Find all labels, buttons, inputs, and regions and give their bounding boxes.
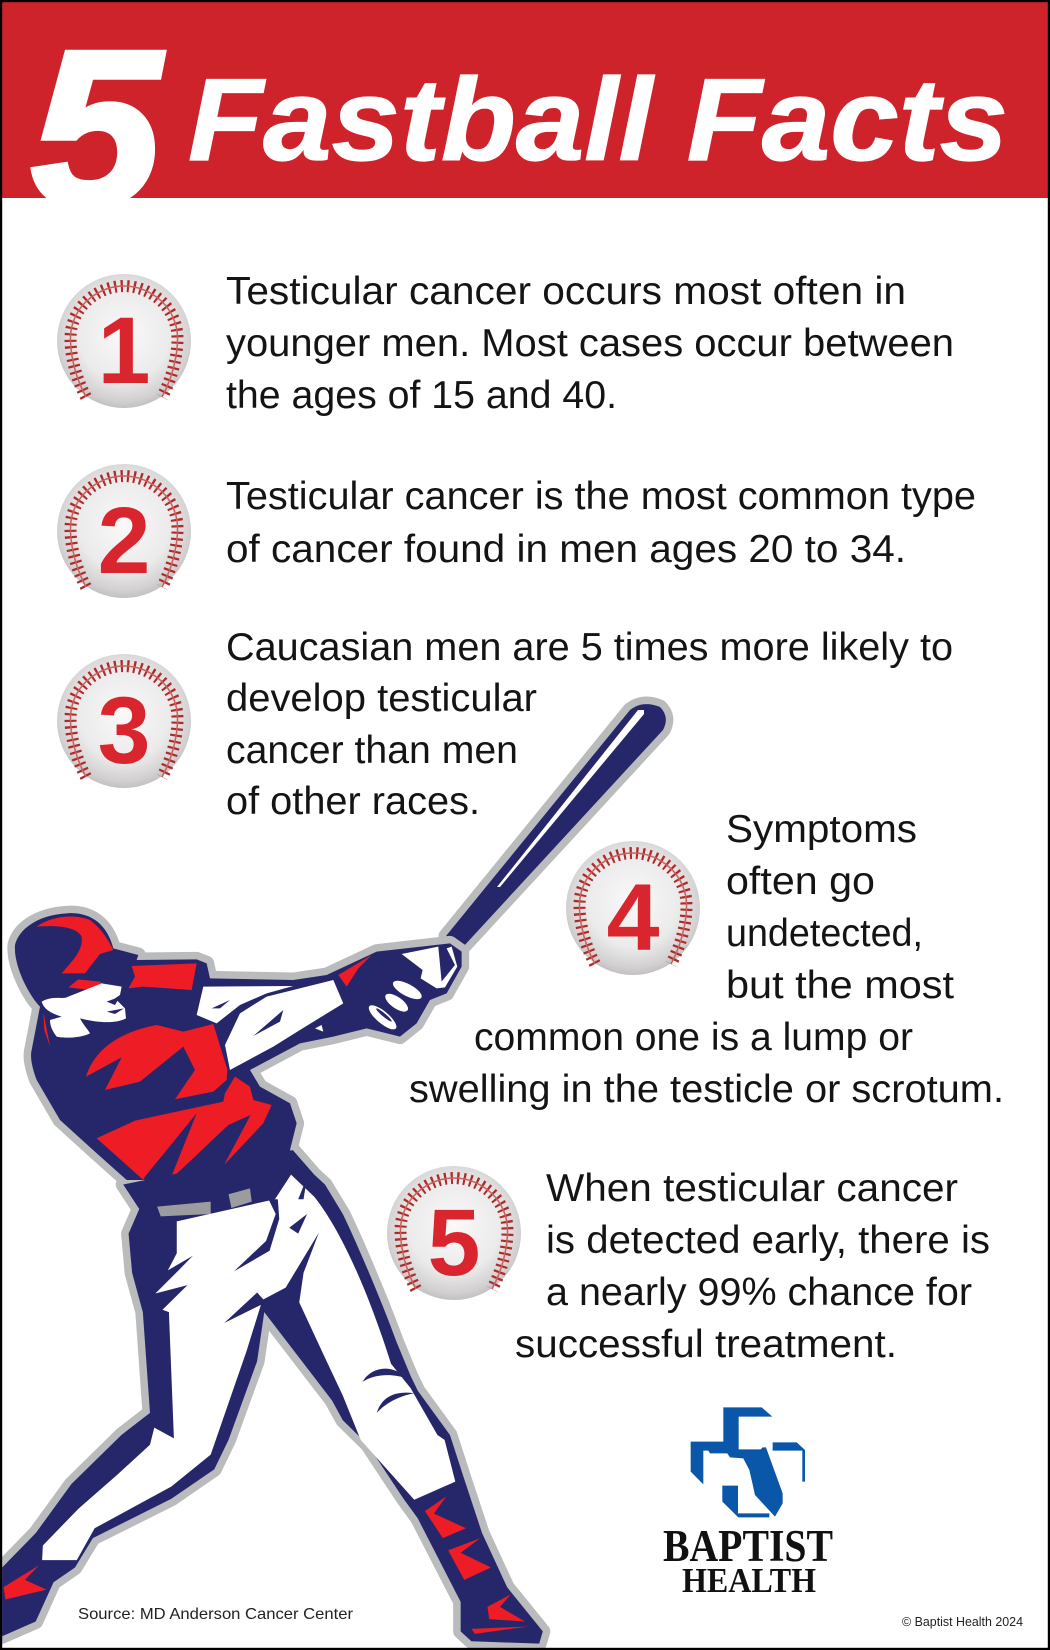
baseball 2 [57, 464, 191, 598]
fact 1 text: the ages of 15 and 40. [226, 374, 617, 417]
collar [128, 963, 197, 990]
fact 3 text: develop testicular [226, 677, 537, 720]
baseball 5 [387, 1166, 521, 1300]
fact 4 text: often go [726, 860, 875, 903]
fact 5 text: When testicular cancer [546, 1167, 958, 1210]
fact 3 text: cancer than men [226, 729, 518, 772]
fact 1 text: younger men. Most cases occur between [226, 322, 954, 365]
pants [42, 1175, 455, 1560]
baseball 3 [57, 654, 191, 788]
logo wordmark [663, 1521, 833, 1600]
pants folds [224, 1177, 414, 1413]
copyright note: © Baptist Health 2024 [902, 1614, 1023, 1629]
baseball 5: 5 [428, 1190, 480, 1296]
fact 2 text: of cancer found in men ages 20 to 34. [226, 528, 906, 571]
upper arm [197, 986, 293, 1023]
fact 4 text: common one is a lump or [474, 1016, 913, 1059]
logo mark [691, 1407, 805, 1517]
logo wordmark: BAPTIST [663, 1521, 833, 1571]
forearm [225, 980, 343, 1070]
cap [37, 917, 113, 973]
upper body [15, 913, 462, 1180]
cleats [4, 1565, 529, 1634]
baseball 1 [57, 274, 191, 408]
Baptist Health logo [663, 1407, 833, 1600]
baseball 2: 2 [98, 488, 150, 594]
fact 5 [387, 1166, 990, 1366]
fact 3 text: of other races. [226, 780, 480, 823]
fact 3 text [226, 626, 953, 823]
fact 2 [57, 464, 976, 598]
title text: Fastball Facts [188, 54, 1008, 185]
jersey [86, 1024, 227, 1099]
baseball 4: 4 [607, 865, 660, 971]
title numeral 5: 5 [31, 5, 165, 253]
baseball bat [446, 704, 666, 947]
fact 1 text: Testicular cancer occurs most often in [226, 270, 906, 313]
batter outline [2, 913, 543, 1644]
glove [338, 955, 372, 987]
logo wordmark: HEALTH [682, 1561, 816, 1600]
fact 4 text [409, 808, 1004, 1111]
fact 5 text: successful treatment. [515, 1323, 897, 1366]
fact 4 text: swelling in the testicle or scrotum. [409, 1068, 1004, 1111]
baseball 1: 1 [98, 298, 150, 404]
baseball 3: 3 [98, 678, 150, 784]
fact 3 text: Caucasian men are 5 times more likely to [226, 626, 953, 669]
baseball 4 [566, 841, 700, 975]
fact 4 text: Symptoms [726, 808, 917, 851]
fact 1 text [226, 270, 954, 417]
fact 3 [57, 626, 953, 823]
fact 4 text: undetected, [726, 912, 923, 955]
lower body [2, 1150, 543, 1644]
fact 2 text [226, 475, 976, 571]
fact 2 text: Testicular cancer is the most common type [226, 475, 976, 518]
fact 4 text: but the most [726, 964, 954, 1007]
source note: Source: MD Anderson Cancer Center [78, 1606, 354, 1623]
belt [157, 1188, 252, 1216]
fact 4 [409, 808, 1004, 1111]
fact 5 text [515, 1167, 990, 1366]
batter illustration [2, 913, 543, 1644]
title banner [2, 2, 1048, 198]
cap brim accent [68, 979, 103, 990]
face [42, 983, 126, 1038]
fact 1 [57, 270, 954, 417]
fact 5 text: a nearly 99% chance for [546, 1271, 972, 1314]
fact 5 text: is detected early, there is [546, 1219, 990, 1262]
socks [425, 1496, 491, 1580]
